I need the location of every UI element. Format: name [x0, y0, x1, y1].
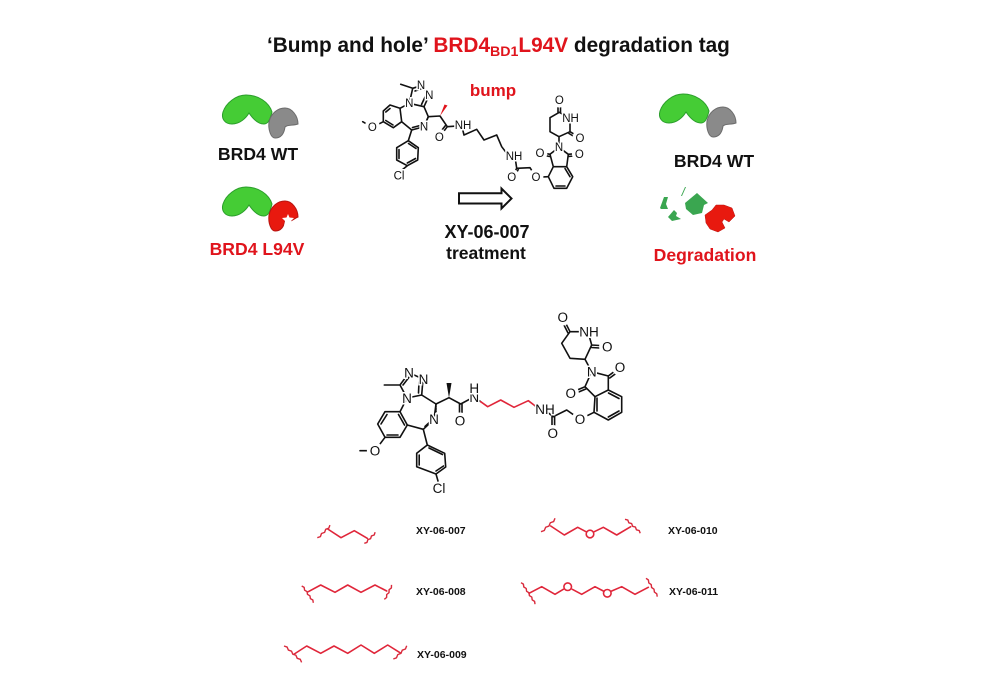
chemical structure: general scaffold with red linker: O: [547, 426, 558, 441]
title: BD1: [490, 44, 519, 60]
chemical structure: general scaffold with red linker: O: [370, 444, 380, 458]
label: BRD4 WT, right: BRD4 WT: [674, 151, 754, 171]
title: ‘Bump and hole’ BRD4: [267, 34, 490, 57]
chemical structure: XY-06-007 with bump: O: [555, 95, 564, 107]
label: XY-06-010: XY-06-010: [668, 525, 718, 537]
title: degradation tag: [574, 34, 730, 57]
chemical structure: XY-06-007 with bump: NH: [506, 151, 522, 163]
chemical structure: general scaffold with red linker: N: [402, 391, 412, 406]
chemical structure: XY-06-007 with bump: O: [575, 149, 584, 161]
chemical structure: XY-06-007 with bump: N: [555, 142, 563, 154]
chemical structure: XY-06-007 with bump: N: [420, 122, 428, 134]
linker: XY-06-009: [284, 645, 407, 662]
label: XY-06-011: XY-06-011: [669, 586, 718, 598]
icon: BRD4 L94V protein: [222, 187, 298, 231]
chemical structure: XY-06-007 with bump: O: [532, 172, 541, 184]
chemical structure: XY-06-007 with bump: O: [435, 132, 444, 144]
linker: XY-06-007: [317, 525, 375, 543]
label: XY-06-008: XY-06-008: [416, 586, 466, 598]
chemical structure: general scaffold with red linker: Cl: [433, 481, 445, 496]
chemical structure: general scaffold with red linker: N: [419, 372, 428, 387]
linker: XY-06-010: [541, 518, 640, 538]
label: BRD4 WT, left: BRD4 WT: [218, 144, 298, 164]
chemical structure: general scaffold with red linker: O: [615, 360, 625, 375]
chemical structure: XY-06-007 with bump: O: [368, 122, 377, 134]
label: bump: bump: [470, 81, 516, 100]
chemical structure: general scaffold with red linker: N: [587, 364, 597, 380]
label: XY-06-009: XY-06-009: [417, 649, 467, 661]
label: BRD4 L94V: BRD4 L94V: [210, 239, 305, 259]
chemical structure: general scaffold with red linker: N: [404, 366, 414, 380]
label: XY-06-007 treatment: treatment: [446, 243, 526, 263]
title: L94V: [518, 34, 568, 57]
chemical structure: general scaffold with red linker: O: [557, 310, 568, 325]
chemical structure: general scaffold with red linker: O: [455, 414, 465, 428]
label: XY-06-007 treatment: XY-06-007: [444, 222, 530, 242]
linker: XY-06-011: [521, 578, 657, 604]
chemical structure: general scaffold with red linker: N: [429, 412, 439, 427]
icon: BRD4 WT protein, left: [222, 95, 298, 138]
label: Degradation: Degradation: [654, 245, 756, 265]
chemical structure: general scaffold with red linker: O: [565, 386, 576, 401]
chemical structure: general scaffold with red linker: N: [469, 390, 479, 405]
chemical structure: general scaffold with red linker: NH: [535, 402, 555, 417]
icon: degraded protein fragments: [660, 187, 735, 232]
chemical structure: general scaffold with red linker: NH: [579, 324, 599, 340]
chemical structure: XY-06-007 with bump: NH: [455, 120, 471, 132]
chemical structure: XY-06-007 with bump: O: [576, 133, 585, 145]
chemical structure: XY-06-007 with bump: N: [405, 98, 413, 110]
chemical structure: XY-06-007 with bump: N: [417, 80, 425, 92]
chemical structure: XY-06-007 with bump: NH: [562, 113, 579, 125]
label: XY-06-007 treatment: [444, 222, 530, 263]
chemical structure: XY-06-007 with bump: N: [425, 90, 433, 102]
chemical structure: general scaffold with red linker: [360, 310, 625, 496]
chemical structure: XY-06-007 with bump: [363, 80, 585, 188]
linker: XY-06-008: [302, 585, 391, 603]
chemical structure: XY-06-007 with bump: O: [536, 148, 545, 160]
chemical structure: general scaffold with red linker: O: [575, 412, 585, 427]
chemical structure: XY-06-007 with bump: Cl: [394, 170, 404, 182]
chemical structure: XY-06-007 with bump: O: [507, 172, 516, 184]
icon: BRD4 WT protein, right: [659, 94, 736, 137]
label: XY-06-007: XY-06-007: [416, 525, 466, 537]
arrow: [459, 188, 512, 208]
chemical structure: general scaffold with red linker: O: [602, 340, 613, 354]
chemical structure: general scaffold with red linker: H: [469, 381, 479, 396]
